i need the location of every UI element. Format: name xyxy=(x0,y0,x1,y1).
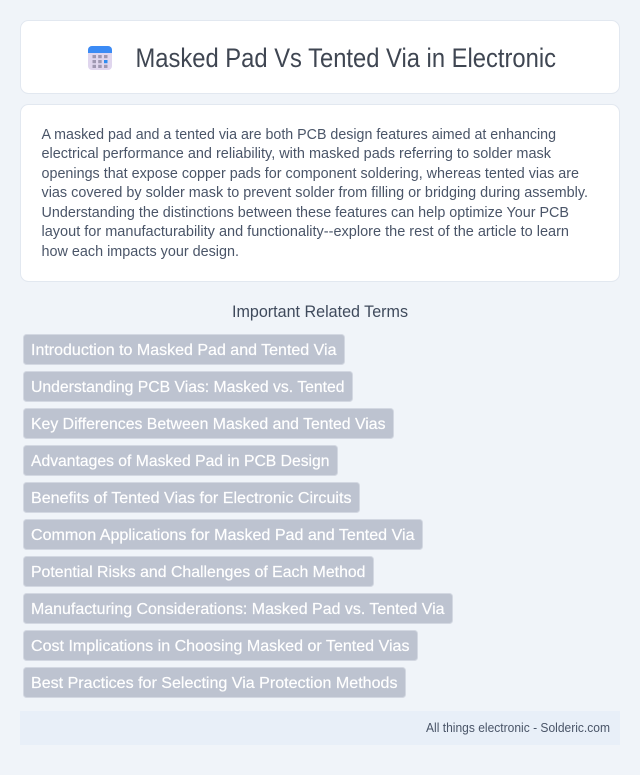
tag: risks xyxy=(24,556,374,586)
panel: header xyxy=(20,20,620,94)
tag: key differences: Key Differences Between Masked and Tented Vias xyxy=(31,416,386,433)
tag: applications: Common Applications for Masked Pad and Tented Via xyxy=(31,527,415,544)
title: Masked Pad Vs Tented Via in Electronic xyxy=(136,43,556,73)
list: related terms xyxy=(24,334,452,698)
tag: advantages: Advantages of Masked Pad in PCB Design xyxy=(31,453,330,470)
tag: introduction xyxy=(24,334,344,364)
text block: description: electrical performance and reliability, with masked pads referring to solder mask xyxy=(42,145,551,162)
tag: risks: Potential Risks and Challenges of Each Method xyxy=(31,564,366,581)
tag: cost xyxy=(24,630,418,660)
text block: description: A masked pad and a tented via are both PCB design features aimed at enhancing xyxy=(42,126,556,143)
tag: cost: Cost Implications in Choosing Masked or Tented Vias xyxy=(31,638,410,655)
tag: advantages xyxy=(24,446,338,476)
text block: description: Understanding the distinctions between these features can help optimize Your PCB xyxy=(42,204,569,221)
text block: description xyxy=(42,126,588,260)
text block: description: vias covered by solder mask to prevent solder from filling or bridging during assembly. xyxy=(42,184,588,201)
tag: key differences xyxy=(24,408,394,438)
tag: benefits: Benefits of Tented Vias for Electronic Circuits xyxy=(31,490,352,507)
heading: related terms: Important Related Terms xyxy=(232,302,408,321)
tag: introduction: Introduction to Masked Pad and Tented Via xyxy=(31,342,337,359)
tag: best practices xyxy=(24,668,406,698)
footer xyxy=(20,711,620,745)
tag: manufacturing: Manufacturing Considerations: Masked Pad vs. Tented Via xyxy=(31,601,445,618)
tag: understanding: Understanding PCB Vias: Masked vs. Tented xyxy=(31,379,344,396)
text block: description: how each impacts your design. xyxy=(42,243,239,260)
icon: calendar xyxy=(88,46,112,70)
text block: description: openings that expose copper pads for component soldering, whereas tented vias are xyxy=(42,165,579,182)
text block: description: layout for manufacturability and functionality--explore the rest of the article to learn xyxy=(42,223,569,240)
tag: applications xyxy=(24,520,422,550)
tag: benefits xyxy=(24,482,360,512)
tag: manufacturing xyxy=(24,594,452,624)
panel: description xyxy=(20,104,620,282)
footer: All things electronic - Solderic.com xyxy=(426,721,610,735)
tag: understanding xyxy=(24,372,352,402)
tag: best practices: Best Practices for Selecting Via Protection Methods xyxy=(31,675,398,692)
